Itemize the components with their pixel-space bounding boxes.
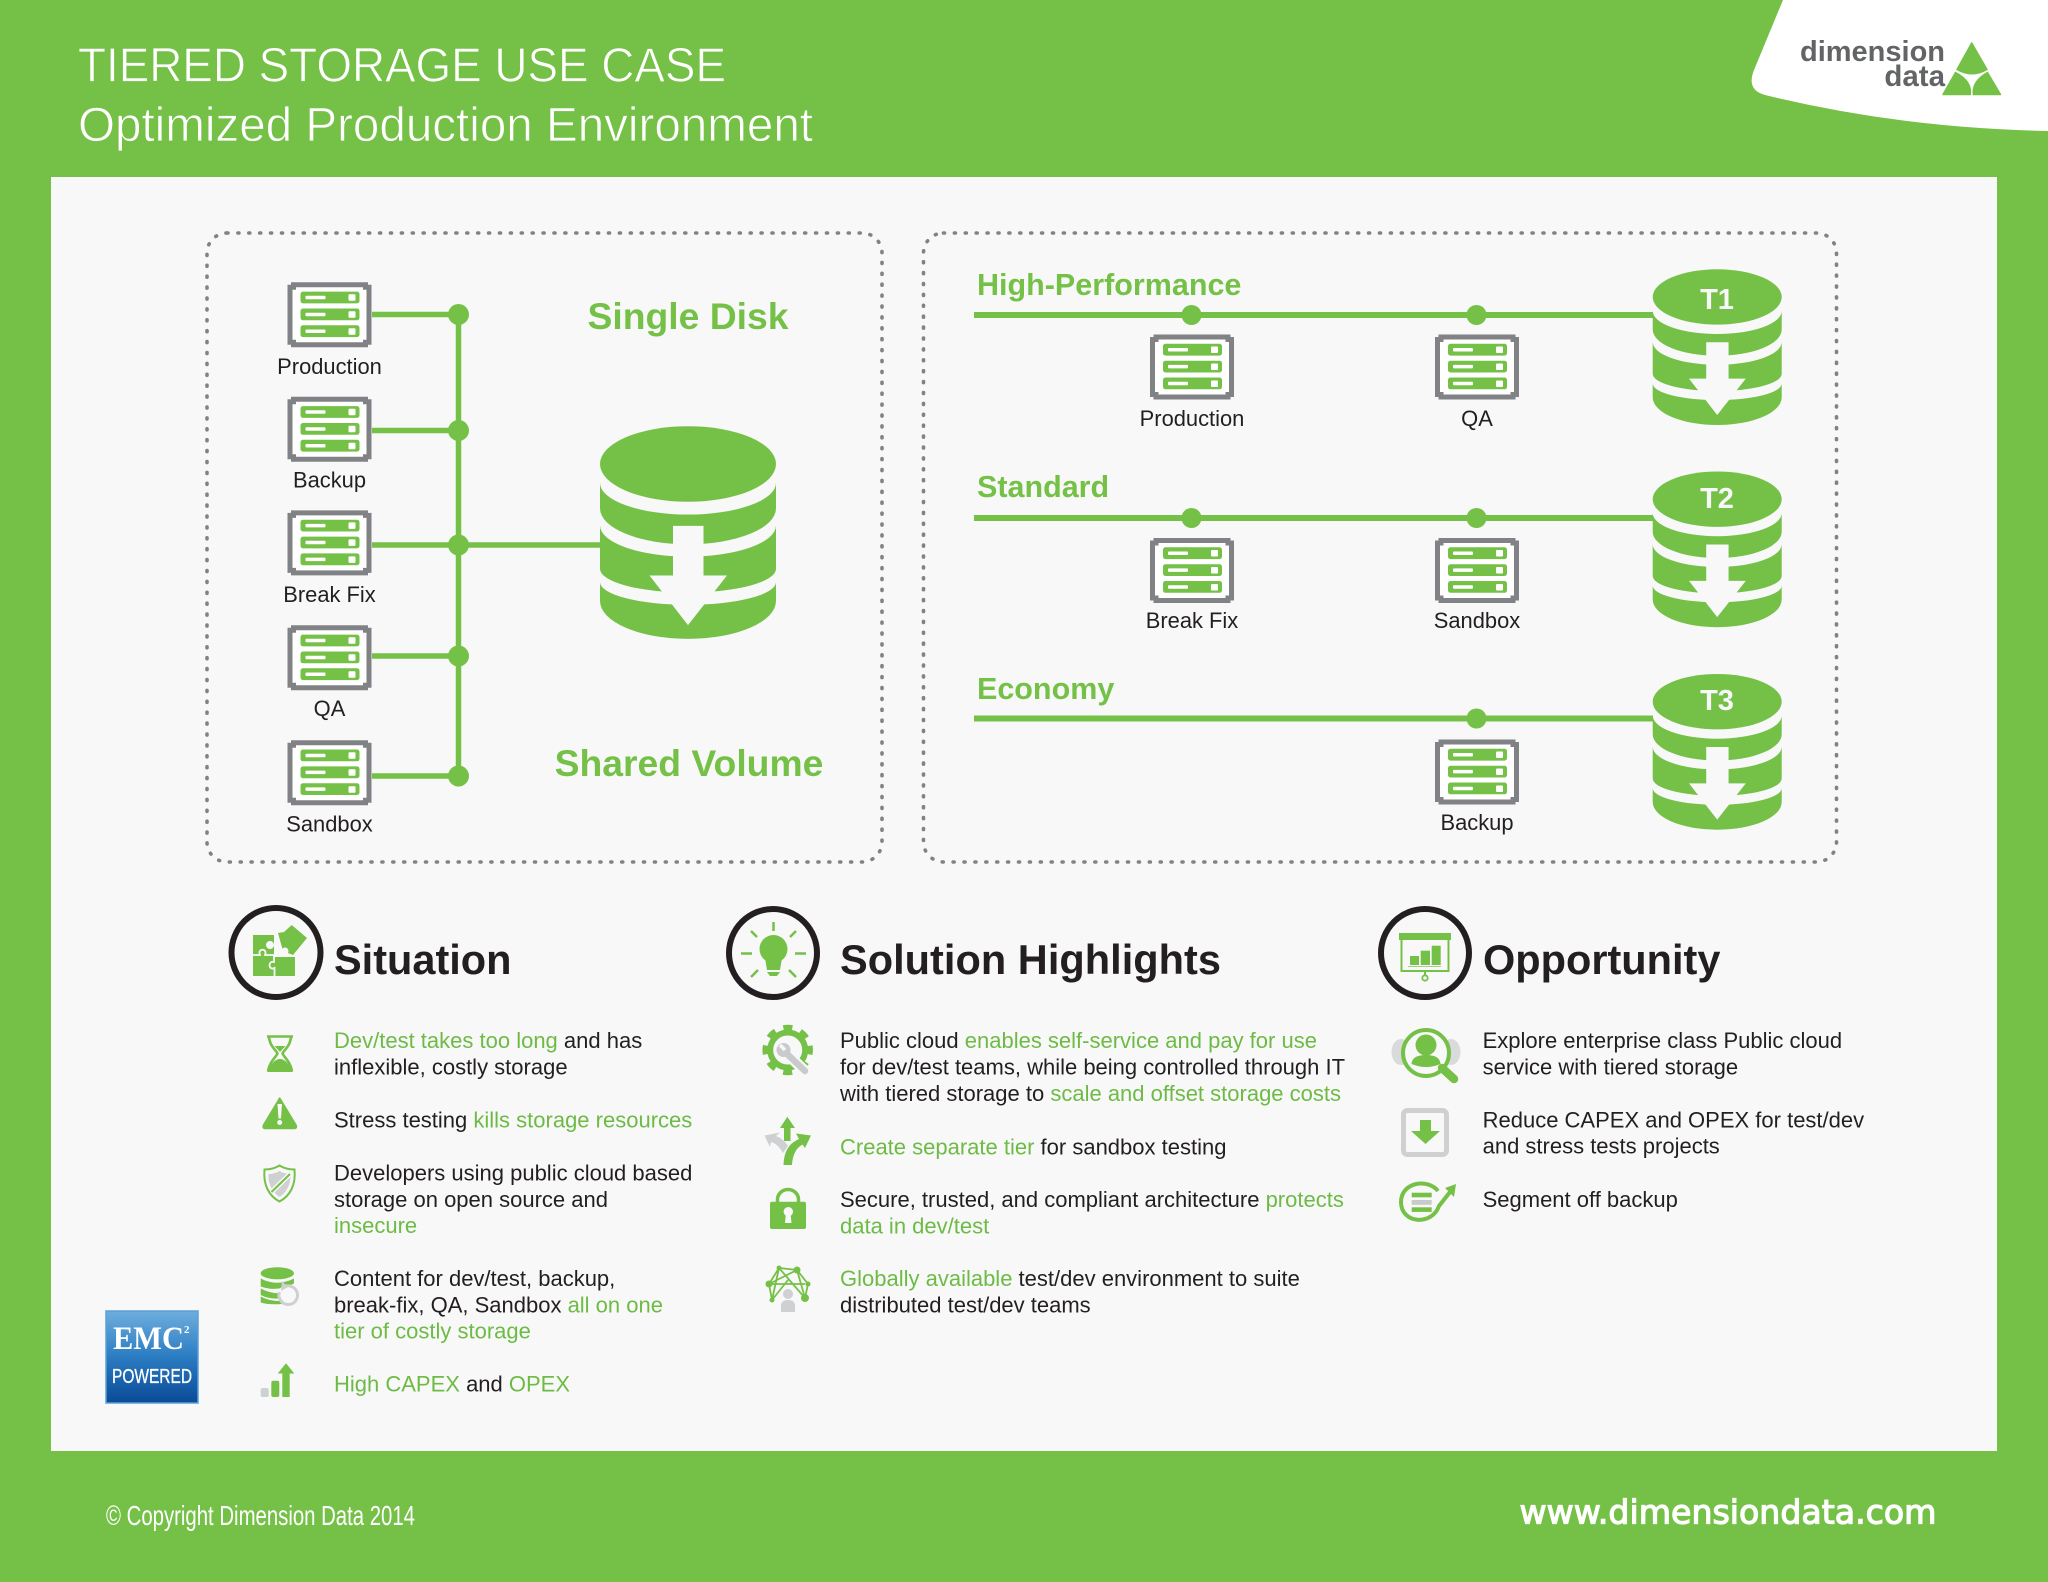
server: Production <box>277 285 382 379</box>
text: developers: Developers using public cloud based <box>334 1160 692 1186</box>
server: Sandbox <box>286 743 373 836</box>
badge: EMC powered: POWERED <box>112 1366 192 1388</box>
text: explore: Explore enterprise class Public cloud <box>1483 1028 1842 1053</box>
icon: segment arrow <box>1401 1183 1456 1220</box>
text: content: tier of costly storage <box>334 1319 531 1344</box>
panel: single disk shared volume <box>207 233 882 862</box>
text: capex opex: High CAPEX and OPEX <box>334 1372 570 1396</box>
icon: hourglass <box>267 1036 293 1072</box>
icon: disk with refresh <box>261 1267 299 1306</box>
server: Backup: Backup <box>293 468 366 492</box>
tier: high-performance <box>974 268 1782 431</box>
tier: high-performance: T1 <box>1700 284 1734 316</box>
heading: situation: Situation <box>334 936 512 983</box>
server: QA <box>290 628 369 721</box>
title: Optimized Production Environment <box>78 99 813 152</box>
tier: standard: T2 <box>1700 483 1734 515</box>
icon: shield <box>264 1166 295 1202</box>
title <box>78 40 813 152</box>
text: dev/test: Dev/test takes too long and has <box>334 1028 642 1053</box>
tier: high-performance: Production <box>1140 406 1244 431</box>
badge: EMC powered: 2 <box>184 1324 190 1336</box>
logo: dimension data <box>1752 0 2048 131</box>
text: segment backup: Segment off backup <box>1483 1187 1678 1212</box>
logo: dimension data: dimension <box>1800 36 1945 68</box>
text: dev/test: inflexible, costly storage <box>334 1054 568 1079</box>
footer: copyright: © Copyright Dimension Data 2014 <box>106 1500 415 1531</box>
tier: economy <box>974 672 1782 835</box>
text: public cloud: Public cloud enables self-service and pay for use <box>840 1028 1317 1053</box>
text: content: Content for dev/test, backup, <box>334 1266 615 1291</box>
icon: padlock <box>770 1190 806 1229</box>
text: content: all on one <box>568 1292 663 1317</box>
server: Break Fix <box>283 513 376 607</box>
text: explore: service with tiered storage <box>1483 1054 1738 1079</box>
icon: forking arrows <box>764 1117 811 1165</box>
icon: light bulb in circle <box>729 909 817 997</box>
icon: magnifier with person <box>1392 1030 1460 1079</box>
section: situation <box>232 908 692 1397</box>
tier: economy: T3 <box>1700 685 1734 717</box>
text: reduce capex: Reduce CAPEX and OPEX for test/dev <box>1483 1107 1864 1132</box>
text: globally available: Globally available test/dev environment to suite <box>840 1266 1300 1291</box>
heading: solution highlights: Solution Highlights <box>840 936 1221 983</box>
icon: presentation in circle <box>1381 909 1469 997</box>
section: solution highlights <box>729 909 1345 1317</box>
heading: single disk: Single Disk <box>587 295 789 337</box>
text: reduce capex: and stress tests projects <box>1483 1134 1720 1159</box>
section: opportunity <box>1381 909 1864 1220</box>
server: Sandbox: Sandbox <box>286 812 373 836</box>
badge: EMC powered: EMC <box>113 1321 184 1357</box>
text: public cloud: for dev/test teams, while being controlled through IT <box>840 1054 1345 1079</box>
server: Break Fix: Break Fix <box>283 582 376 607</box>
text: developers: insecure <box>334 1213 417 1238</box>
icon: puzzle in circle <box>232 908 320 997</box>
tier: standard: Standard <box>977 470 1109 504</box>
text: public cloud: with tiered storage to <box>839 1081 1050 1106</box>
icon: global network <box>766 1266 810 1312</box>
icon: large disk <box>600 426 776 639</box>
badge: EMC powered <box>106 1311 198 1403</box>
server: Backup <box>290 399 369 492</box>
text: create tier: Create separate tier for sandbox testing <box>840 1134 1226 1159</box>
footer: website: www.dimensiondata.com <box>1520 1493 1936 1532</box>
heading: opportunity: Opportunity <box>1483 936 1720 983</box>
tier: high-performance: QA <box>1461 406 1493 431</box>
text: globally available: distributed test/dev teams <box>840 1292 1091 1317</box>
icon: rising chart <box>261 1363 294 1397</box>
text: content: break-fix, QA, Sandbox <box>334 1292 568 1317</box>
tier: high-performance: High-Performance <box>977 268 1241 302</box>
server: QA: QA <box>314 696 346 721</box>
tier: economy: Economy <box>977 672 1114 706</box>
title: TIERED STORAGE USE CASE <box>78 40 726 92</box>
main white panel <box>51 177 1997 1451</box>
icon: down arrow box <box>1404 1110 1446 1154</box>
text: secure: Secure, trusted, and compliant architecture protects <box>840 1187 1344 1212</box>
text: stress testing: Stress testing kills storage resources <box>334 1107 692 1132</box>
connector lines <box>372 304 600 786</box>
text: public cloud: scale and offset storage costs <box>1050 1081 1341 1106</box>
tier: economy: Backup <box>1440 810 1514 835</box>
logo: dimension data: data <box>1884 60 1946 93</box>
heading: shared volume: Shared Volume <box>555 742 823 784</box>
server: Production: Production <box>277 354 382 379</box>
text: secure: data in dev/test <box>840 1213 989 1238</box>
icon: warning <box>263 1098 296 1128</box>
tier: standard: Sandbox <box>1434 608 1520 633</box>
text: developers: storage on open source and <box>334 1187 608 1212</box>
panel: tiered storage <box>924 233 1836 862</box>
tier: standard <box>974 470 1782 633</box>
icon: gear and wrench <box>765 1028 810 1072</box>
tier: standard: Break Fix <box>1146 608 1238 633</box>
